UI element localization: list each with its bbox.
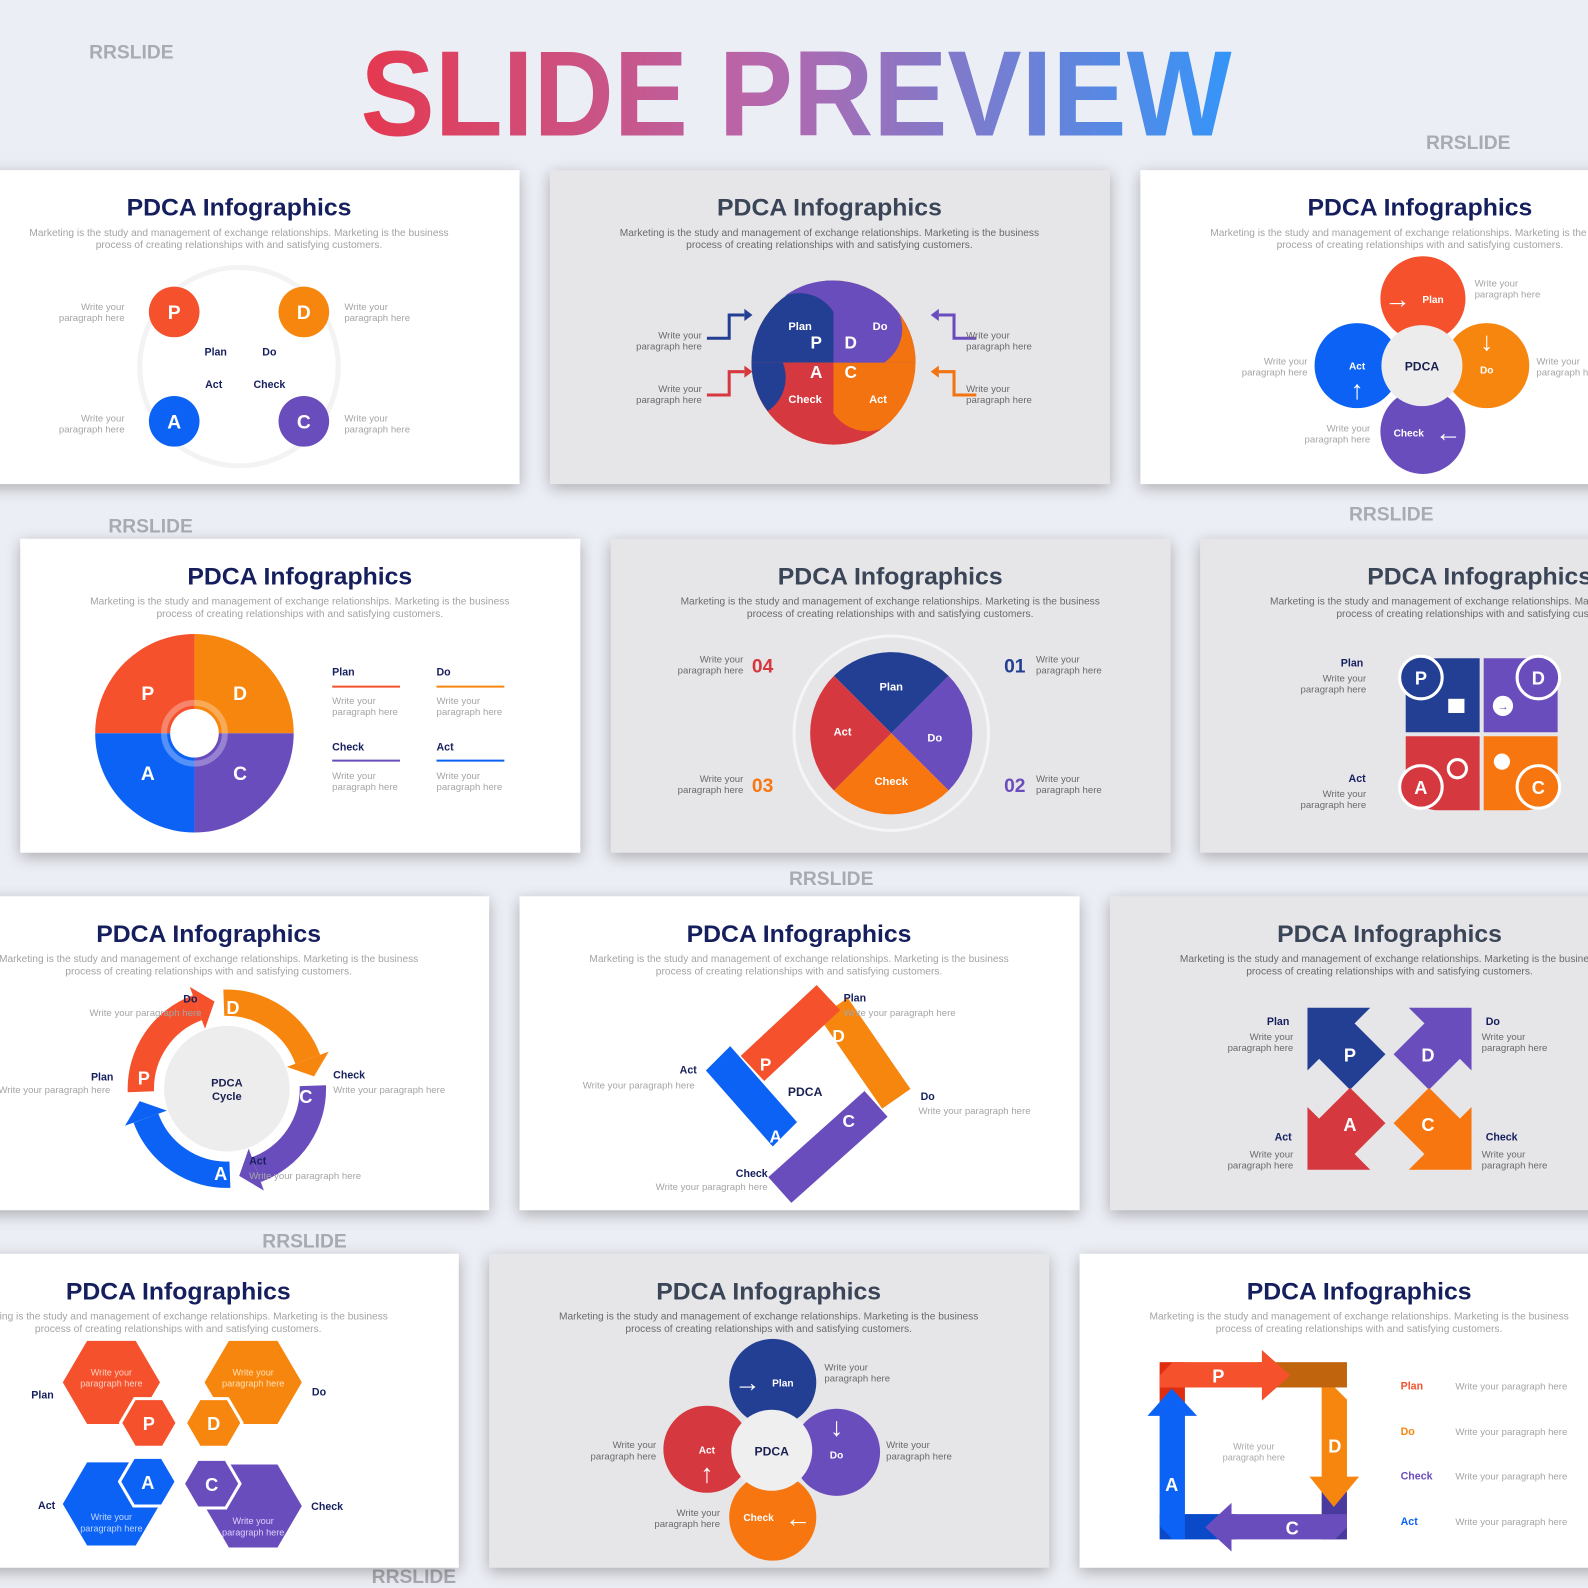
P circle: P [168, 303, 181, 324]
slide 2: pinwheel: paragraph here [636, 395, 702, 406]
legend: paragraph here [436, 782, 502, 793]
slide 6: rounded grid: Plan [1341, 657, 1363, 669]
quadrant circle: Plan [879, 682, 903, 694]
legend: Act [1401, 1516, 1418, 1528]
quadrant circle: Do [927, 732, 942, 744]
slide 10: hexagons: process of creating relationships with and satisfying customers. [35, 1324, 322, 1335]
slide 7: arrow ring: Write your paragraph here [249, 1171, 361, 1182]
legend: Check [1401, 1471, 1433, 1483]
slide 8: diamond bands: Write your paragraph here [919, 1106, 1031, 1117]
flower: Check [743, 1513, 774, 1524]
slide 5: diagonal quadrants: paragraph here [1036, 785, 1102, 796]
legend: Plan [1401, 1381, 1423, 1393]
bands: C [842, 1111, 855, 1131]
D circle [279, 287, 329, 337]
slide 5: diagonal quadrants: paragraph here [678, 785, 743, 796]
slide 3: flower circles: paragraph here [1475, 290, 1540, 301]
slide 10: hexagons: Act [38, 1500, 56, 1512]
slide 7: arrow ring: Write your paragraph here [333, 1085, 445, 1096]
hex cluster: D [207, 1414, 220, 1434]
slide 7: arrow ring: PDCA Infographics [96, 921, 321, 948]
arrow shapes: C [1421, 1115, 1435, 1135]
slide 12: square arrows: Marketing is the study and management of exchange relationships. Marketing is the business [1149, 1312, 1569, 1323]
legend: Do [1401, 1426, 1415, 1438]
hex cluster: Write your [233, 1367, 274, 1377]
slide 3: flower circles [1140, 170, 1588, 484]
grid: A [1414, 778, 1427, 798]
slide 10: hexagons [0, 1254, 459, 1568]
slide 9: outward arrows [1110, 896, 1588, 1210]
slide 5: diagonal quadrants: paragraph here [1036, 665, 1102, 676]
grid: → [1497, 701, 1508, 713]
slide 3: flower circles: Write your [1536, 357, 1581, 368]
flower: ↓ [1480, 326, 1493, 356]
P circle [149, 287, 200, 337]
flower: Plan [772, 1378, 794, 1389]
watermark: RRSLIDE [372, 1567, 456, 1588]
slide 3: flower circles: PDCA Infographics [1307, 195, 1532, 222]
pinwheel circle: C [844, 362, 857, 382]
arrow shapes: D [1421, 1045, 1435, 1065]
slide 2: pinwheel: paragraph here [636, 341, 702, 352]
slide 3: flower circles: Write your [1475, 279, 1519, 290]
slide 1: circle cycle: Do [262, 346, 277, 358]
legend: Write your [332, 696, 377, 707]
legend: paragraph here [332, 782, 398, 793]
slide 9: outward arrows: process of creating relationships with and satisfying customers. [1246, 966, 1533, 977]
legend: Check [332, 741, 364, 753]
slide 11: flower circles gray: paragraph here [591, 1451, 656, 1462]
bands: P [760, 1054, 771, 1074]
slide 1: circle cycle: Write your [344, 413, 389, 424]
slide 9: outward arrows: Write your [1482, 1150, 1526, 1161]
cycle arrows: C [299, 1087, 312, 1107]
slide 11: flower circles gray: PDCA Infographics [656, 1278, 881, 1305]
square arrow loop: P [1212, 1366, 1224, 1386]
slide 1: circle cycle: Write your [344, 302, 389, 313]
pinwheel circle: Do [873, 321, 888, 333]
slide 8: diamond bands: Write your paragraph here [844, 1008, 956, 1019]
slide 8: diamond bands: PDCA Infographics [687, 921, 911, 948]
slide 7: arrow ring: Write your paragraph here [0, 1085, 110, 1096]
slide 3: flower circles: Write your [1327, 423, 1371, 434]
flower: ← [785, 1503, 811, 1533]
watermark: RRSLIDE [1426, 133, 1510, 154]
cycle arrows: P [138, 1069, 150, 1089]
flower: PDCA [1405, 360, 1439, 374]
hex cluster: Write your [91, 1367, 132, 1377]
pie chart: C [233, 764, 247, 785]
hex cluster: paragraph here [80, 1523, 143, 1533]
slide 7: arrow ring: Marketing is the study and management of exchange relationships. Marketing is the business [0, 954, 418, 965]
grid: P [1415, 669, 1427, 689]
flower: Act [699, 1445, 716, 1456]
legend: Write your paragraph here [1455, 1472, 1567, 1483]
slide 7: arrow ring: Act [249, 1156, 267, 1168]
bands: D [832, 1026, 845, 1046]
slide 3: flower circles: process of creating relationships with and satisfying customers. [1277, 240, 1563, 251]
watermark: RRSLIDE [1349, 504, 1433, 526]
hex cluster: Write your [233, 1516, 274, 1526]
slide 6: rounded grid: paragraph here [1300, 800, 1366, 811]
pie chart: A [141, 764, 155, 785]
legend: Write your [436, 771, 481, 782]
slide 1: circle cycle: Marketing is the study and management of exchange relationships. Marketing is the business [29, 228, 449, 239]
slide 12: square arrows: process of creating relationships with and satisfying customers. [1216, 1324, 1502, 1335]
A circle: A [167, 412, 181, 433]
slide 5: diagonal quadrants: PDCA Infographics [778, 563, 1003, 590]
slide 5: diagonal quadrants [611, 539, 1171, 853]
slide 1: circle cycle: Check [253, 379, 285, 391]
pinwheel circle [751, 281, 916, 445]
slide 9: outward arrows: Write your [1250, 1032, 1294, 1043]
hex cluster: paragraph here [222, 1378, 284, 1388]
slide 2: pinwheel: paragraph here [966, 341, 1032, 352]
slide 5: diagonal quadrants: 02 [1004, 776, 1025, 797]
D circle: D [297, 303, 311, 324]
slide 6: rounded grid: Write your [1323, 789, 1367, 800]
slide 1: circle cycle: paragraph here [344, 313, 410, 324]
hex cluster: A [141, 1473, 154, 1493]
slide 6: rounded grid: PDCA Infographics [1367, 563, 1588, 590]
pinwheel circle: Check [788, 394, 823, 406]
slide 2: pinwheel: PDCA Infographics [717, 195, 942, 222]
cycle arrows: A [214, 1164, 227, 1184]
legend: Write your [436, 696, 481, 707]
pie chart: D [233, 684, 247, 705]
square arrow loop: A [1165, 1475, 1178, 1495]
slide 11: flower circles gray: Write your [613, 1440, 657, 1451]
slide 1: circle cycle: paragraph here [59, 313, 125, 324]
quadrant circle: Act [834, 726, 852, 738]
slide 5: diagonal quadrants: Marketing is the study and management of exchange relationships. Marketing is the business [681, 597, 1100, 608]
flower: ↑ [1351, 375, 1364, 405]
flower: → [734, 1368, 761, 1398]
arrow shapes: A [1343, 1115, 1357, 1135]
pinwheel circle: A [810, 362, 823, 382]
legend: paragraph here [332, 707, 398, 718]
slide 10: hexagons: Do [312, 1387, 327, 1399]
slide 2: pinwheel: Write your [658, 384, 703, 395]
grid [1400, 656, 1560, 810]
watermark: RRSLIDE [89, 43, 174, 64]
bands: A [770, 1126, 782, 1146]
slide 1: circle cycle: paragraph here [59, 424, 125, 435]
slide 1: circle cycle: Write your [81, 413, 125, 424]
square arrow loop: paragraph here [1223, 1452, 1285, 1462]
slide 12: square arrows [1080, 1254, 1588, 1568]
slide 2: pinwheel: process of creating relationships with and satisfying customers. [686, 240, 973, 251]
slide 7: arrow ring [0, 896, 489, 1210]
pinwheel circle: P [811, 332, 822, 352]
slide 8: diamond bands: Write your paragraph here [583, 1081, 695, 1092]
square arrow loop: Write your [1233, 1441, 1274, 1451]
slide 2: pinwheel: Write your [966, 384, 1011, 395]
legend: Write your [332, 771, 377, 782]
slide 5: diagonal quadrants: Write your [1036, 654, 1080, 665]
hex cluster: Write your [91, 1512, 132, 1522]
slide 9: outward arrows: Plan [1267, 1016, 1289, 1028]
slide 6: rounded grid: paragraph here [1300, 685, 1366, 696]
flower: ↓ [830, 1412, 843, 1442]
slide 5: diagonal quadrants: 03 [752, 776, 773, 797]
slide 2: pinwheel [550, 170, 1110, 484]
slide 4: pie [20, 539, 580, 853]
slide 5: diagonal quadrants: Write your [700, 654, 744, 665]
cycle arrows: D [226, 998, 240, 1018]
flower: Do [1480, 366, 1493, 377]
slide 3: flower circles: paragraph here [1242, 368, 1307, 379]
slide 3: flower circles: Write your [1264, 357, 1308, 368]
step arrows [707, 309, 976, 395]
watermark: RRSLIDE [108, 517, 193, 538]
flower: ← [1435, 418, 1461, 448]
pinwheel circle: D [844, 332, 857, 352]
slide 5: diagonal quadrants: paragraph here [678, 665, 743, 676]
slide 11: flower circles gray [489, 1254, 1049, 1568]
flower: Check [1394, 428, 1424, 439]
slide 8: diamond bands: process of creating relationships with and satisfying customers. [656, 966, 942, 977]
hex cluster [63, 1341, 302, 1547]
slide 1: circle cycle: Write your [81, 302, 125, 313]
slide 11: flower circles gray: process of creating relationships with and satisfying customers. [625, 1324, 912, 1335]
legend: Do [436, 667, 451, 679]
slide 2: pinwheel: Marketing is the study and management of exchange relationships. Marketing is the business [620, 228, 1039, 239]
cycle arrows: Cycle [212, 1091, 242, 1103]
hex cluster: paragraph here [222, 1527, 284, 1537]
slide 8: diamond bands [520, 896, 1080, 1210]
slide 7: arrow ring: Do [183, 994, 198, 1006]
slide 9: outward arrows: Check [1486, 1131, 1518, 1143]
slide 9: outward arrows: paragraph here [1228, 1161, 1293, 1172]
legend: Write your paragraph here [1455, 1517, 1567, 1528]
C circle: C [297, 412, 311, 433]
slide 8: diamond bands: Plan [844, 993, 866, 1005]
flower: Plan [1422, 295, 1444, 306]
cycle arrows: PDCA [211, 1078, 243, 1090]
flower: ↑ [700, 1459, 713, 1489]
slide 9: outward arrows: Write your [1482, 1032, 1526, 1043]
slide 9: outward arrows: paragraph here [1482, 1043, 1547, 1054]
slide 8: diamond bands: Write your paragraph here [656, 1182, 768, 1193]
slide 8: diamond bands: Do [921, 1091, 935, 1103]
slide 11: flower circles gray: paragraph here [886, 1451, 952, 1462]
slide 9: outward arrows: Write your [1250, 1150, 1294, 1161]
slide 7: arrow ring: Plan [91, 1072, 113, 1084]
flower: PDCA [755, 1444, 789, 1458]
slide 10: hexagons: PDCA Infographics [66, 1278, 291, 1305]
slide 1: circle cycle: Act [205, 379, 223, 391]
square arrow loop: C [1286, 1518, 1299, 1538]
grid: C [1532, 778, 1545, 798]
slide 7: arrow ring: Write your paragraph here [90, 1008, 202, 1019]
legend [1401, 1381, 1567, 1528]
pie chart: P [141, 684, 154, 705]
quadrant circle [810, 652, 972, 814]
quadrant circle: Check [875, 776, 909, 788]
slide 11: flower circles gray: Write your [676, 1508, 721, 1519]
slide 11: flower circles gray: paragraph here [824, 1373, 890, 1384]
square arrow loop: D [1328, 1436, 1341, 1456]
slide 11: flower circles gray: Write your [824, 1362, 869, 1373]
slide 9: outward arrows: Act [1275, 1131, 1292, 1143]
slide 6: rounded grid: Write your [1323, 674, 1367, 685]
slide 12: square arrows: PDCA Infographics [1247, 1278, 1472, 1305]
legend: Write your paragraph here [1455, 1427, 1567, 1438]
slide 5: diagonal quadrants: process of creating relationships with and satisfying customers. [747, 609, 1034, 620]
watermark: RRSLIDE [262, 1232, 347, 1253]
pie chart [95, 634, 294, 832]
slide 4: pie: PDCA Infographics [187, 563, 412, 590]
hex cluster: paragraph here [80, 1378, 143, 1388]
slide 3: flower circles: paragraph here [1305, 435, 1370, 446]
pinwheel circle: Plan [788, 321, 812, 333]
slide 5: diagonal quadrants: Write your [700, 774, 744, 785]
slide 10: hexagons: Plan [31, 1390, 54, 1402]
legend: Plan [332, 667, 355, 679]
slide 5: diagonal quadrants: Write your [1036, 774, 1080, 785]
slide 8: diamond bands: Act [680, 1065, 697, 1077]
flower [663, 1339, 880, 1561]
square arrow loop [1147, 1350, 1359, 1552]
legend: Act [436, 741, 454, 753]
slide 9: outward arrows: paragraph here [1228, 1043, 1293, 1054]
slide 1: circle cycle: Plan [204, 346, 227, 358]
slide 6: rounded grid: Act [1349, 773, 1366, 785]
slide 1: circle cycle: PDCA Infographics [127, 195, 351, 222]
bands: PDCA [788, 1085, 823, 1099]
slide 1: circle cycle [0, 170, 520, 484]
bands [706, 985, 910, 1203]
watermark: RRSLIDE [789, 869, 873, 890]
legend: Write your paragraph here [1455, 1382, 1567, 1393]
hex cluster: C [205, 1475, 218, 1495]
slide 5: diagonal quadrants: 04 [752, 656, 774, 677]
pinwheel circle: Act [869, 394, 887, 406]
slide 7: arrow ring: process of creating relationships with and satisfying customers. [65, 966, 352, 977]
grid: D [1532, 669, 1545, 689]
flower: Do [830, 1450, 843, 1461]
slide 10: hexagons: Check [311, 1501, 343, 1513]
slide 8: diamond bands: Check [736, 1168, 768, 1180]
flower: → [1384, 284, 1411, 314]
slide 7: arrow ring: Check [333, 1070, 365, 1082]
flower [1315, 256, 1529, 474]
slide 11: flower circles gray: Marketing is the study and management of exchange relationships. Marketing is the business [559, 1312, 978, 1323]
slide 4: pie: process of creating relationships with and satisfying customers. [156, 609, 443, 620]
slide 11: flower circles gray: paragraph here [654, 1519, 720, 1530]
A circle [149, 396, 200, 447]
slide 11: flower circles gray: Write your [886, 1440, 931, 1451]
C circle [279, 396, 329, 447]
legend: paragraph here [436, 707, 502, 718]
slide 5: diagonal quadrants: 01 [1004, 656, 1026, 677]
slide 9: outward arrows: Marketing is the study and management of exchange relationships. Marketing is the business [1180, 954, 1588, 965]
slide 6: rounded grid [1200, 539, 1588, 853]
arrow shapes: P [1344, 1045, 1356, 1065]
slide 4: pie: Marketing is the study and management of exchange relationships. Marketing is the business [90, 597, 509, 608]
arrow shapes [1307, 1008, 1472, 1170]
slide 1: circle cycle: paragraph here [344, 424, 410, 435]
slide 9: outward arrows: Do [1486, 1016, 1500, 1028]
slide 1: circle cycle: process of creating relationships with and satisfying customers. [96, 240, 382, 251]
legend [332, 667, 504, 793]
slide 9: outward arrows: paragraph here [1482, 1161, 1547, 1172]
cycle arrows [125, 987, 329, 1191]
slide 8: diamond bands: Marketing is the study and management of exchange relationships. Marketing is the business [589, 954, 1009, 965]
slide 2: pinwheel: paragraph here [966, 395, 1032, 406]
slide 2: pinwheel: Write your [658, 330, 703, 341]
slide 2: pinwheel: Write your [966, 330, 1011, 341]
slide 9: outward arrows: PDCA Infographics [1277, 921, 1502, 948]
hex cluster: P [143, 1414, 155, 1434]
flower: Act [1349, 362, 1366, 373]
